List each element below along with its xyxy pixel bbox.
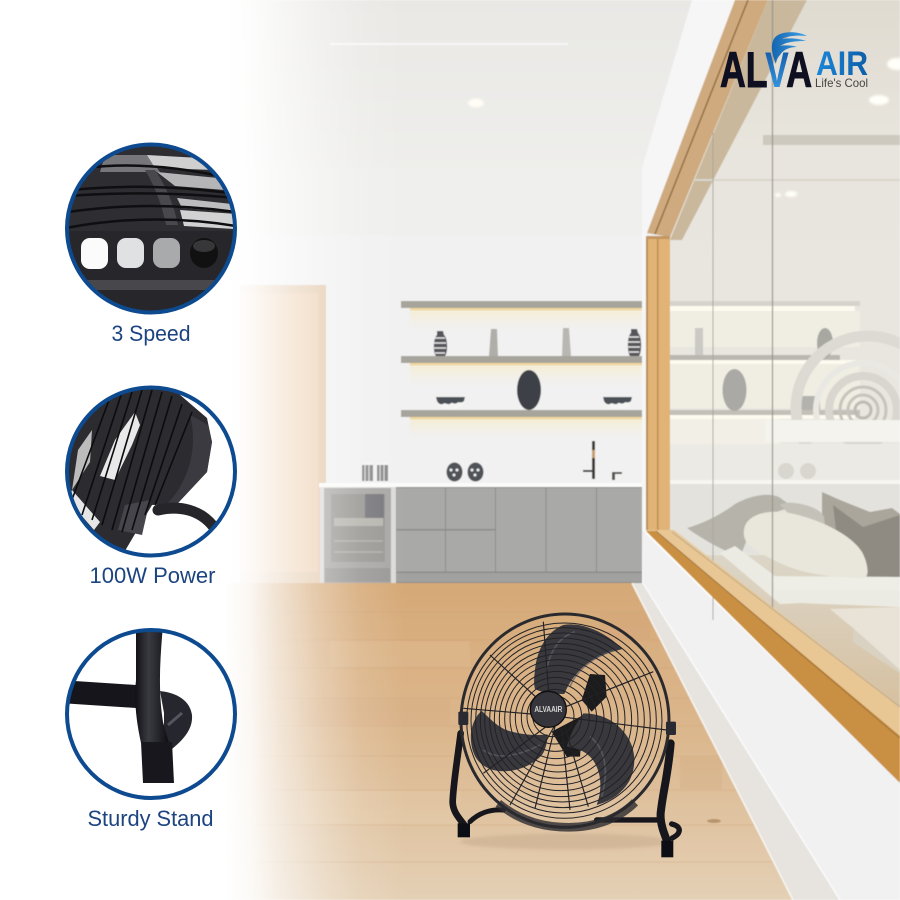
circular photo: stand foot bbox=[60, 625, 235, 798]
stand feet bbox=[458, 823, 673, 857]
blade highlights bbox=[483, 632, 615, 797]
ceiling bbox=[0, 0, 700, 240]
lower wall and baseboard bbox=[632, 530, 900, 900]
logo wordmark AIR: AIR bbox=[816, 45, 868, 83]
cabinets bbox=[396, 487, 642, 583]
reflected shelves bbox=[670, 301, 860, 306]
wine fridge bbox=[324, 488, 391, 583]
wood window frame bbox=[646, 0, 900, 783]
feature: 100W Power bbox=[60, 388, 235, 588]
reflected ceiling bbox=[763, 135, 900, 145]
ceiling spotlight bbox=[468, 98, 484, 108]
feature: Sturdy Stand bbox=[60, 625, 235, 831]
counter decor and faucet bbox=[362, 441, 622, 482]
glass seams bbox=[712, 130, 714, 620]
reflected wall art bbox=[790, 330, 900, 444]
hub with logo bbox=[530, 691, 566, 727]
door bbox=[240, 285, 326, 583]
circular photo: motor housing bbox=[60, 388, 235, 556]
lower guard band bbox=[498, 802, 635, 827]
ceiling slot bbox=[330, 43, 568, 45]
counter side panel bbox=[320, 487, 396, 583]
label: Sturdy Stand: Sturdy Stand bbox=[88, 806, 214, 831]
sofa bolster bbox=[744, 512, 868, 578]
room background photo bbox=[240, 0, 900, 900]
logo: Alva Air bbox=[720, 32, 868, 98]
reflected wood beam bbox=[670, 0, 807, 240]
fan blades bbox=[471, 624, 634, 805]
feature: 3 Speed bbox=[65, 142, 237, 346]
fan product bbox=[453, 614, 679, 857]
floor bbox=[200, 583, 793, 900]
side brackets bbox=[458, 712, 676, 735]
glass window bbox=[670, 0, 900, 707]
shelf decor bbox=[434, 328, 641, 410]
logo wordmark ALVA: ALVA bbox=[720, 42, 812, 98]
counter top bbox=[319, 483, 642, 488]
logo wing bbox=[772, 32, 807, 64]
reflected table bbox=[830, 607, 900, 670]
hub with logo: ALVAAIR bbox=[534, 705, 563, 714]
sill reflection bbox=[650, 530, 900, 745]
side wall upper bbox=[642, 0, 735, 535]
outer ring bbox=[461, 614, 669, 827]
shelves bbox=[401, 301, 642, 440]
blanket bbox=[687, 494, 786, 552]
reflected pillows bbox=[822, 492, 900, 530]
soffit band bbox=[230, 168, 642, 236]
motor shadow behind blades bbox=[552, 674, 607, 757]
logo tagline: Life's Cool bbox=[815, 76, 868, 90]
label: 3 Speed: 3 Speed bbox=[112, 321, 190, 346]
floor shadow bbox=[460, 834, 673, 850]
back wall bbox=[230, 235, 642, 585]
reflected floor bbox=[706, 555, 900, 706]
sofa seat bbox=[720, 546, 900, 607]
stand bbox=[453, 733, 679, 842]
circular photo: speed buttons bbox=[65, 142, 237, 314]
reflected counter bbox=[800, 444, 900, 480]
label: 100W Power: 100W Power bbox=[90, 563, 216, 588]
wire guard bbox=[463, 622, 667, 818]
